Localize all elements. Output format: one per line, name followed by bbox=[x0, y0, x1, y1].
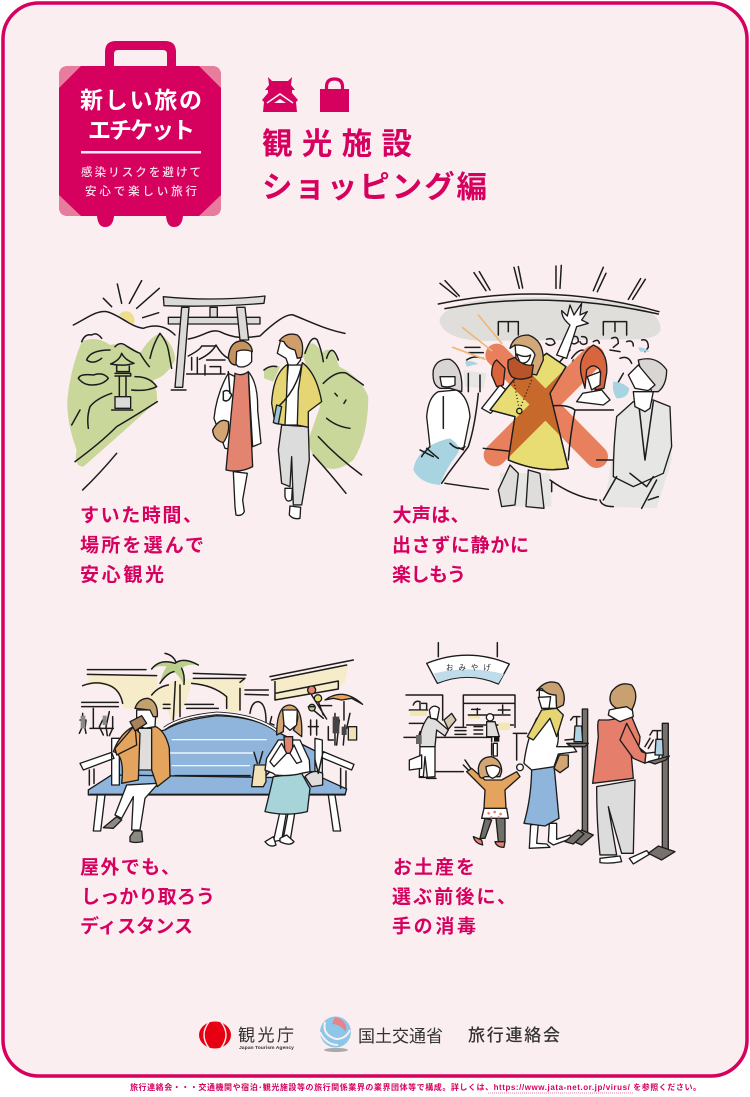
suitcase body bbox=[59, 66, 221, 216]
woman's cardigan bbox=[214, 372, 261, 450]
left seated woman bbox=[413, 359, 470, 485]
man's legs bbox=[278, 425, 309, 505]
badge subheading bbox=[81, 165, 201, 198]
balloons bbox=[308, 686, 327, 719]
badge subheading: 安心で楽しい旅行 bbox=[85, 184, 198, 198]
man in red hoodie bbox=[593, 684, 660, 864]
voice lines bbox=[453, 315, 502, 359]
stone lantern bbox=[111, 353, 134, 410]
badge divider bbox=[81, 151, 201, 154]
paper shopping bag bbox=[252, 765, 266, 787]
bench back bbox=[112, 716, 317, 785]
woman's dress bbox=[226, 372, 253, 471]
caption: sanitize hands: 手の消毒 bbox=[392, 916, 476, 938]
suitcase corners bbox=[59, 66, 221, 216]
mother with mask bbox=[524, 682, 583, 848]
logo: Japan Tourism Agency bbox=[199, 1022, 294, 1050]
back windows bbox=[498, 322, 627, 335]
gray ceiling band bbox=[439, 297, 661, 341]
suitcase wheels bbox=[97, 216, 183, 227]
man in yellow jacket bbox=[272, 334, 322, 519]
background shoppers left bbox=[79, 712, 113, 736]
right masked man bbox=[600, 359, 672, 508]
scarf bbox=[508, 357, 533, 379]
seat backs bbox=[442, 393, 620, 500]
caption: no loud voices: 楽しもう bbox=[392, 564, 466, 586]
right sanitizer stand bbox=[645, 723, 675, 860]
caption: no loud voices: 出さずに静かに bbox=[392, 534, 529, 556]
woman's bag bbox=[213, 420, 229, 443]
illustration: couple visiting a shrine bbox=[67, 281, 368, 519]
sun bbox=[119, 311, 134, 325]
badge heading: 新しい旅の bbox=[80, 87, 202, 113]
caption: visit at quiet times bbox=[80, 504, 204, 586]
man's shirt bbox=[283, 365, 302, 425]
man's strap and pouch bbox=[278, 365, 302, 407]
man's head bbox=[137, 710, 156, 728]
tree outlines left bbox=[72, 333, 172, 490]
torii gate bbox=[163, 296, 265, 390]
footer note: 旅行連絡会・・・交通機関や宿泊･観光施設等の旅行関係業界の業界団体等で構成。詳しくは、https://www.jata-net.or.jp/virus/ を参照ください。 bbox=[130, 1082, 701, 1092]
green trees right bbox=[264, 343, 368, 469]
badge heading: エチケット bbox=[88, 117, 195, 143]
woman covering her ears bbox=[577, 345, 610, 405]
orange X mark bbox=[495, 355, 597, 457]
caption: keep distance outdoors: しっかり取ろう bbox=[81, 886, 215, 908]
logo: Japan Tourism Agency: Japan Tourism Agency bbox=[239, 1045, 294, 1050]
badge heading bbox=[80, 87, 202, 143]
title: 観光施設 bbox=[262, 128, 412, 162]
background shoppers right bbox=[270, 713, 350, 745]
child in orange top bbox=[463, 757, 523, 847]
man's orange jacket bbox=[113, 725, 170, 787]
gray seat shadows bbox=[463, 370, 672, 508]
coffee cup bbox=[130, 716, 147, 731]
man's gray shirt bbox=[138, 728, 153, 770]
illustration: distance on a bench bbox=[79, 653, 363, 846]
caption: visit at quiet times: すいた時間、 bbox=[80, 504, 202, 526]
caption: sanitize hands: お土産を bbox=[393, 856, 475, 878]
caption: keep distance outdoors: 屋外でも、 bbox=[80, 856, 180, 878]
lowered arm bbox=[482, 385, 510, 413]
cheering woman bbox=[482, 303, 597, 508]
woman's head bbox=[233, 350, 252, 367]
shop shelves bbox=[404, 695, 527, 772]
woman's legs bbox=[233, 472, 247, 515]
hand bbox=[492, 360, 505, 387]
caption: keep distance outdoors bbox=[80, 856, 215, 938]
logo: MLIT bbox=[320, 1016, 443, 1052]
background clerk bbox=[486, 714, 499, 756]
palm leaves bbox=[152, 653, 198, 720]
caption: keep distance outdoors: ディスタンス bbox=[80, 914, 193, 938]
caption: sanitize hands: 選ぶ前後に、 bbox=[392, 886, 516, 908]
face bbox=[515, 343, 537, 372]
dress overlap with X bbox=[510, 372, 562, 456]
tree outlines right bbox=[264, 338, 363, 493]
icon: castle bbox=[262, 77, 298, 112]
illustration: no loud voices in an audience bbox=[413, 265, 672, 508]
sun rays bbox=[103, 281, 159, 318]
suitcase handle bbox=[105, 41, 176, 66]
man's jacket bbox=[272, 363, 322, 427]
badge subheading: 感染リスクを避けて bbox=[81, 165, 201, 179]
woman with smartphone bbox=[265, 705, 310, 846]
gray handbag bbox=[305, 771, 323, 787]
building lines bbox=[82, 660, 353, 728]
logo: Japan Tourism Agency: 観光庁 bbox=[238, 1026, 294, 1045]
icon: shopping bag bbox=[320, 79, 349, 112]
shrine building bbox=[187, 345, 228, 375]
caption: no loud voices: 大声は、 bbox=[392, 504, 470, 526]
caption: visit at quiet times: 場所を選んで bbox=[80, 534, 204, 556]
legs bbox=[498, 465, 544, 508]
caption: visit at quiet times: 安心観光 bbox=[80, 564, 164, 586]
parasol bbox=[308, 694, 363, 720]
title bbox=[262, 128, 487, 204]
green trees left bbox=[67, 333, 175, 467]
suitcase badge bbox=[59, 41, 221, 227]
raised arm bbox=[557, 303, 588, 358]
omiyage shop sign bbox=[427, 643, 509, 684]
man drinking coffee bbox=[103, 698, 170, 842]
bench arms and legs bbox=[80, 738, 354, 785]
caption: sanitize hands bbox=[392, 856, 516, 938]
mountains bbox=[73, 311, 345, 339]
woman in red dress bbox=[213, 341, 261, 515]
man's arm bbox=[115, 725, 137, 755]
logo: travel liaison council: 旅行連絡会 bbox=[468, 1026, 560, 1045]
man's head bbox=[277, 340, 301, 365]
bench seat bbox=[88, 775, 347, 795]
illustration: hand sanitizing at souvenir shop bbox=[404, 643, 675, 864]
necklace bbox=[514, 380, 532, 410]
title: ショッピング編 bbox=[262, 170, 487, 204]
beige buildings bbox=[88, 665, 348, 722]
omiyage shop sign: おみやげ bbox=[446, 663, 491, 672]
distant audience bbox=[465, 336, 648, 392]
ceiling arcs and struts bbox=[438, 265, 659, 314]
man's legs bbox=[115, 783, 158, 830]
caption: no loud voices bbox=[392, 504, 529, 586]
left sanitizer stand bbox=[565, 709, 593, 845]
background shopper bbox=[409, 706, 456, 778]
logo: MLIT: 国土交通省 bbox=[358, 1027, 443, 1046]
dress bbox=[490, 353, 568, 470]
